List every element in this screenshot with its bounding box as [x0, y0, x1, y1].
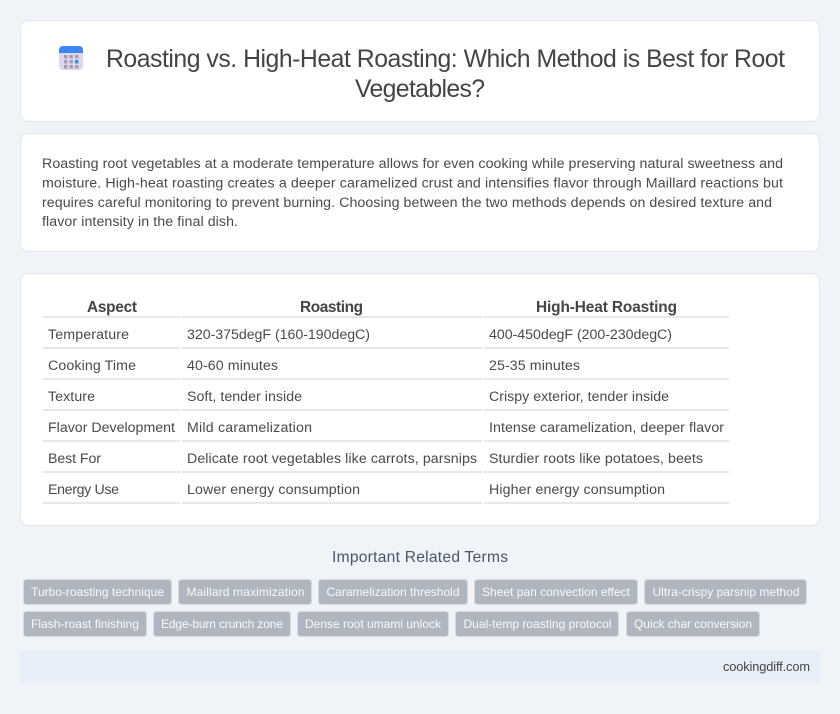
row: energy use: Lower energy consumption	[187, 482, 360, 498]
row: cooking time: Cooking Time	[48, 358, 136, 374]
text block: summary: flavor intensity in the final dish.	[42, 214, 238, 230]
tag: Sheet pan convection effect	[482, 585, 631, 599]
row: cooking time: 40-60 minutes	[187, 358, 278, 374]
tag	[154, 612, 290, 636]
footer source text: cookingdiff.com	[723, 659, 810, 674]
tag	[474, 580, 638, 604]
tag	[644, 580, 806, 604]
table header row: High-Heat Roasting	[536, 299, 677, 316]
row: energy use: Higher energy consumption	[489, 482, 665, 498]
icon: calendar	[59, 46, 83, 70]
tag list	[24, 580, 806, 636]
text block: summary: Roasting root vegetables at a moderate temperature allows for even cooking while preserving natural sweetness and	[42, 156, 783, 172]
row: best for: Sturdier roots like potatoes, beets	[489, 451, 703, 467]
tag	[626, 612, 760, 636]
row: temperature: Temperature	[48, 327, 129, 343]
tag	[24, 612, 146, 636]
row: texture: Crispy exterior, tender inside	[489, 389, 669, 405]
panel: comparison table	[20, 274, 820, 526]
row: cooking time: 25-35 minutes	[489, 358, 580, 374]
tag	[456, 612, 618, 636]
row: flavor development: Mild caramelization	[187, 420, 312, 436]
row: energy use: Energy Use	[48, 482, 119, 498]
panel: title card	[20, 20, 820, 122]
table header row: Roasting	[300, 299, 363, 316]
row: best for	[48, 451, 703, 467]
tag: Dual-temp roasting protocol	[464, 617, 612, 631]
tag: Edge-burn crunch zone	[161, 617, 283, 631]
title: Roasting vs. High-Heat Roasting: Which Method is Best for Root	[106, 46, 785, 73]
row: cooking time	[48, 358, 580, 374]
tag: Maillard maximization	[186, 585, 304, 599]
tag	[318, 580, 468, 604]
tag	[298, 612, 448, 636]
row: texture: Texture	[48, 389, 95, 405]
tag: Dense root umami unlock	[305, 617, 442, 631]
row: texture: Soft, tender inside	[187, 389, 302, 405]
row: temperature: 400-450degF (200-230degC)	[489, 327, 672, 343]
heading: important related terms: Important Related Terms	[332, 549, 508, 566]
row: temperature: 320-375degF (160-190degC)	[187, 327, 370, 343]
tag: Ultra-crispy parsnip method	[652, 585, 800, 599]
row: best for: Best For	[48, 451, 101, 467]
tag: Turbo-roasting technique	[31, 585, 164, 599]
tag	[178, 580, 312, 604]
tag: Caramelization threshold	[326, 585, 460, 599]
row: flavor development	[48, 420, 724, 436]
title: Vegetables?	[355, 76, 485, 103]
tag: Quick char conversion	[634, 617, 752, 631]
row: flavor development: Flavor Development	[48, 420, 175, 436]
tag	[24, 580, 172, 604]
row: best for: Delicate root vegetables like carrots, parsnips	[187, 451, 477, 467]
panel: summary text	[20, 134, 820, 252]
tag: Flash-roast finishing	[31, 617, 139, 631]
footer bar	[20, 650, 820, 684]
text block: summary: requires careful monitoring to prevent burning. Choosing between the two methods depends on desired texture and	[42, 195, 772, 211]
table header row	[87, 299, 677, 316]
row: energy use	[48, 482, 665, 498]
row: flavor development: Intense caramelization, deeper flavor	[489, 420, 724, 436]
text block: summary: moisture. High-heat roasting creates a deeper caramelized crust and intensifies flavor through Maillard reactions but	[42, 176, 783, 192]
row: texture	[48, 389, 669, 405]
table header row: Aspect	[87, 299, 137, 316]
row: temperature	[48, 327, 672, 343]
